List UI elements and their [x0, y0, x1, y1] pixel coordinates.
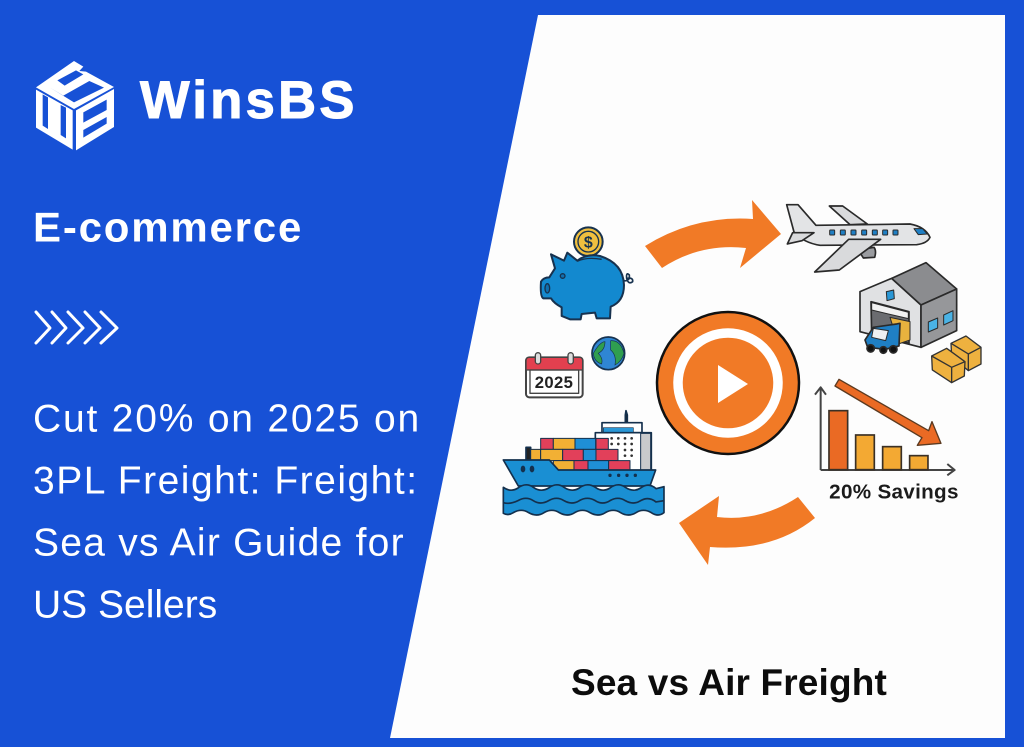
caption: Sea vs Air Freight: Sea vs Air Freight — [571, 662, 887, 703]
icon: container ship — [503, 411, 664, 515]
icon: airplane — [787, 205, 930, 272]
panel: white slanted illustration panel — [390, 15, 1005, 738]
arrow: top curved orange — [645, 200, 781, 268]
icon: play button — [657, 312, 799, 454]
title text — [33, 398, 421, 626]
logo: isometric cube — [36, 61, 114, 150]
trend arrow — [835, 379, 941, 445]
icon: piggy bank with coin: $ — [584, 234, 593, 251]
brand name: WinsBS — [140, 71, 358, 130]
bars — [829, 411, 928, 470]
heading: category: E-commerce — [33, 204, 303, 250]
title text: Sea vs Air Guide for — [33, 522, 405, 564]
icon: cardboard boxes — [932, 336, 981, 383]
title text: Cut 20% on 2025 on — [33, 398, 421, 440]
chart axes — [815, 387, 955, 475]
icon: globe — [592, 337, 625, 370]
bar chart: 20% savings — [815, 379, 959, 504]
icon: piggy bank with coin — [541, 227, 633, 319]
icon: calendar 2025 — [526, 353, 583, 397]
icon: chevrons — [36, 312, 117, 343]
icon: calendar 2025: 2025 — [535, 373, 573, 392]
chart label: 20% Savings — [829, 481, 959, 504]
icon: warehouse with truck — [860, 263, 957, 353]
title text: US Sellers — [33, 584, 217, 626]
arrow: bottom curved orange — [679, 496, 815, 565]
title text: 3PL Freight: Freight: — [33, 460, 419, 502]
